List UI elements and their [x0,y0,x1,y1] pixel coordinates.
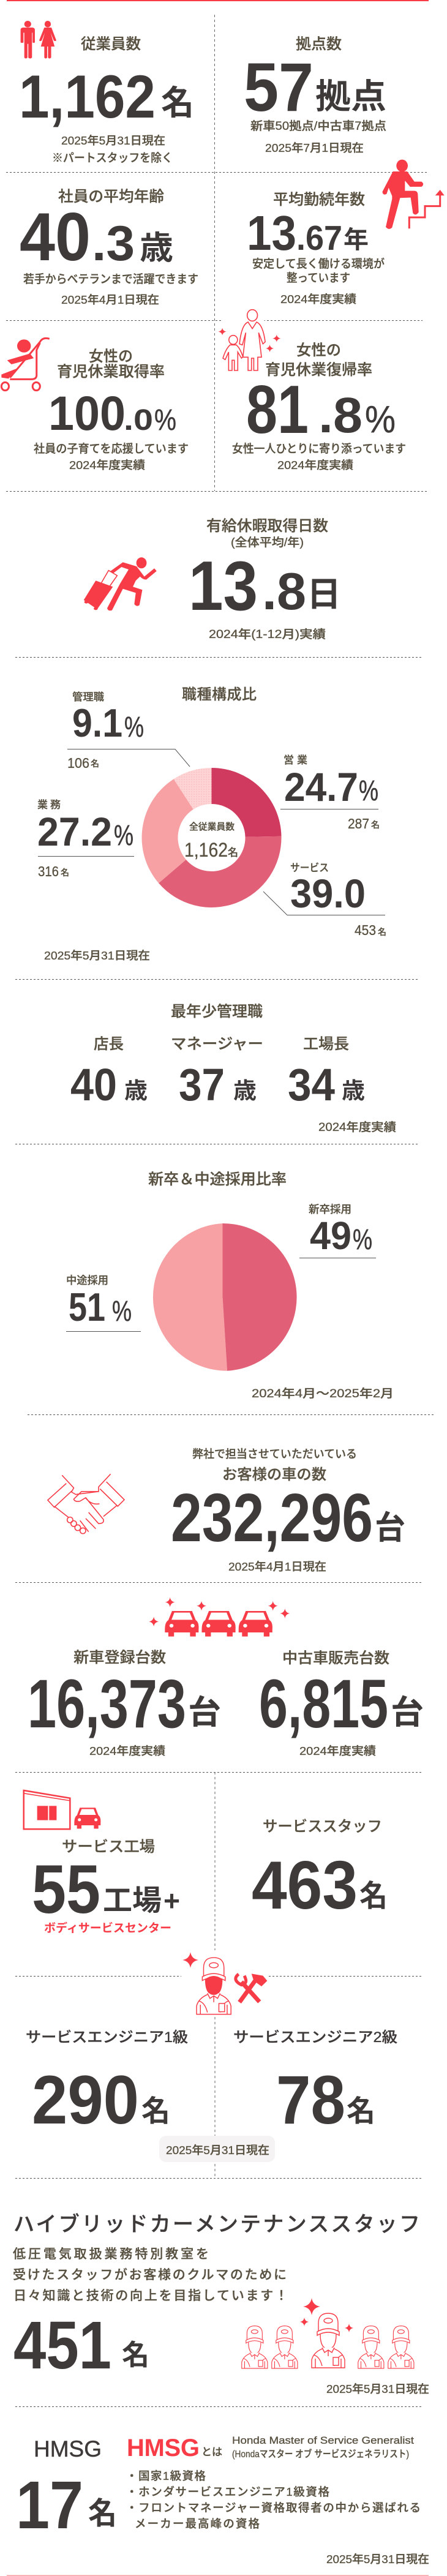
label: office work: 名 [61,868,69,877]
used cars column [259,1650,424,1757]
icon: handshake [48,1474,124,1534]
date: 2025年5月31日現在 [326,2383,429,2395]
label: office work: 316 [38,863,59,879]
definition title: とは [201,2446,222,2458]
icon: five workers with sparkles [242,2298,414,2368]
used cars column: 6,815 [259,1665,388,1742]
column: store manager: 店長 [94,1035,124,1053]
label: management: 106 [67,755,89,771]
date: 2025年5月31日現在 [61,134,165,147]
value: 57 [244,49,314,126]
new cars column: 新車登録台数 [73,1649,166,1666]
description: 日々知識と技術の向上を目指しています！ [13,2289,288,2303]
heading [57,348,165,380]
panel: average tenure [247,160,445,306]
icon: three cars with sparkles [149,1598,290,1637]
label: office work [37,799,134,879]
date pill [159,2136,275,2162]
label: sales: 名 [371,820,380,830]
used cars column: 2024年度実績 [299,1744,376,1757]
column: manager [171,1036,263,1110]
label: office work: 27.2 [37,809,112,854]
value: 100 [48,386,126,440]
heading: 育児休業復帰率 [265,361,372,378]
heading: サービス工場 [62,1838,155,1855]
value: 1,162 [19,62,156,130]
label: management: 管理職 [72,691,104,703]
date: 2024年4月〜2025年2月 [252,1387,394,1400]
value: 名 [122,2339,149,2371]
column: factory manager [288,1035,365,1110]
label: office work: 業務 [37,799,61,811]
date: 2024年度実績 [318,1121,396,1134]
pie chart [153,1223,297,1371]
top rule [7,0,429,1]
full name [232,2435,414,2460]
panel: average age [20,188,198,306]
panel: job composition [37,686,386,962]
label: sales [280,754,380,832]
date: 2024年度実績 [280,293,356,306]
value: % [365,399,396,441]
column: factory manager: 歳 [342,1078,365,1103]
label: management: 名 [91,759,99,768]
label: sales: 営業 [284,754,307,766]
heading: 平均勤続年数 [273,191,365,208]
used cars column: 中古車販売台数 [282,1650,389,1667]
label: sales: 287 [348,816,369,832]
used cars column: 台 [391,1694,424,1731]
value [189,547,341,625]
panel: service engineer grade 1 [26,2029,188,2138]
note: ※パートスタッフを除く [52,151,173,165]
panel: childcare return rate [219,309,406,471]
value [244,49,386,126]
date: 2025年5月31日現在 [44,949,150,962]
label: service: 39.0 [290,871,366,916]
column: manager: 歳 [233,1078,257,1103]
value: + [163,1885,180,1917]
value: 78 [276,2062,345,2138]
label: new graduates: 新卒採用 [309,1203,351,1215]
body service centre note: ボディサービスセンター [44,1921,171,1935]
value: .67 [296,219,342,258]
heading: 職種構成比 [182,686,257,703]
value: .8 [262,563,306,621]
label: service: サービス [290,862,329,874]
value: 55 [32,1851,100,1928]
subheading: (全体平均/年) [231,536,304,549]
panel: childcare leave rate [1,338,189,471]
heading: サービスエンジニア2級 [233,2029,397,2046]
qualification list: メーカー最高峰の資格 [135,2517,260,2530]
value: 40 [20,199,91,275]
column: manager: 37 [179,1059,225,1110]
value [246,372,396,448]
panel: youngest managers [70,1003,396,1134]
value: 13 [189,547,258,625]
label: sales: 24.7 [284,764,358,809]
value: 名 [359,1880,388,1913]
panel: service factories [24,1790,180,1935]
value: 名 [161,84,194,122]
heading: お客様の車の数 [222,1466,326,1483]
panel: HMSG [16,2435,429,2566]
label: new graduates: 49 [310,1214,351,1258]
value [48,386,176,440]
donut centre total: 全従業員数 [189,822,235,832]
full name: Honda Master of Service Generalist [232,2435,414,2446]
date: 2025年7月1日現在 [265,141,364,154]
label: mid-career: % [112,1294,132,1327]
description [13,2247,288,2303]
heading: 最年少管理職 [171,1003,263,1020]
value: 名 [347,2095,375,2128]
panel: paid leave [84,517,341,641]
heading: HMSG [34,2436,102,2461]
heading [265,342,372,378]
value: 290 [32,2062,139,2138]
column: store manager: 40 [70,1059,117,1110]
donut chart [142,768,282,907]
panel: employees [19,21,194,165]
qualification list: ・国家1級資格 [126,2469,206,2482]
panel: hybrid maintenance staff [13,2213,429,2395]
label: new graduates [299,1203,376,1258]
label: management: 9.1 [72,700,122,745]
date pill: 2025年5月31日現在 [166,2144,269,2157]
donut centre total: 1,162 [184,839,228,861]
date: 2024年(1-12月)実績 [209,628,326,641]
bottom rule [7,2575,429,2576]
value: 81 [246,372,309,448]
description: 受けたスタッフがお客様のクルマのために [13,2268,287,2282]
value: .0 [124,404,153,437]
value [247,206,369,260]
full name: (Hondaマスター オブ サービスジェネラリスト) [232,2448,409,2460]
label: management: % [124,710,144,743]
value [32,1851,180,1928]
label: service: 453 [355,922,376,938]
label: mid-career: 中途採用 [66,1274,108,1286]
value: .3 [92,216,135,271]
value: 232,296 [171,1480,373,1556]
new cars column: 16,373 [28,1665,186,1742]
qualification list: ・フロントマネージャー資格取得者の中から選ばれる [126,2501,421,2514]
panel: service engineer grade 2 [233,2029,397,2138]
icon: factory and car [24,1790,100,1829]
panel: customer cars [48,1448,405,1573]
date: 2025年4月1日現在 [228,1560,326,1573]
label: mid-career [66,1274,141,1331]
date: 2024年度実績 [69,459,145,471]
column: factory manager: 工場長 [303,1035,349,1053]
heading: 育児休業取得率 [57,363,165,380]
value: .8 [318,388,362,443]
label: service: 名 [378,927,386,937]
column: manager: マネージャー [171,1036,263,1053]
new cars column: 2024年度実績 [89,1744,165,1757]
panel: service staff [252,1818,388,1923]
value: 463 [252,1847,358,1923]
label: office work: % [114,819,133,851]
value: 名 [88,2496,117,2531]
date: 2024年度実績 [277,459,353,471]
heading: サービススタッフ [263,1818,382,1835]
column: factory manager: 34 [288,1059,335,1110]
caption: 安定して長く働ける環境が [252,257,385,271]
date: 2025年4月1日現在 [61,293,159,306]
caption: 女性一人ひとりに寄り添っています [232,442,406,456]
icon: engineer with tools [181,1950,267,2016]
icon: mother and child [219,309,280,372]
subheading: 弊社で担当させていただいている [192,1448,357,1460]
value: 年 [344,227,369,253]
donut centre total [184,822,238,861]
caption: 若手からベテランまで活躍できます [23,272,198,286]
icon: man and woman [21,21,56,59]
date: 2025年5月31日現在 [326,2553,429,2566]
description: 低圧電気取扱業務特別教室を [13,2247,209,2261]
label: mid-career: 51 [69,1285,105,1329]
icon: stroller [1,338,50,391]
value: 台 [375,1510,405,1546]
value: 日 [307,575,341,614]
heading: 従業員数 [81,36,141,53]
value [20,199,173,275]
heading: 社員の平均年齢 [58,188,164,205]
label: new graduates: % [353,1223,372,1255]
label: sales: % [359,774,378,806]
panel: car sales [28,1598,424,1757]
heading: 拠点数 [296,36,342,53]
definition title: HMSG [127,2435,200,2461]
breakdown: 新車50拠点/中古車7拠点 [250,119,386,133]
heading: 女性の [89,348,133,365]
heading: ハイブリッドカーメンテナンススタッフ [13,2213,420,2236]
qualification list: ・ホンダサービスエンジニア1級資格 [126,2485,329,2498]
heading: 有給休暇取得日数 [206,517,328,535]
value: 拠点 [315,77,386,116]
value: 451 [13,2308,111,2383]
heading: 女性の [296,342,341,359]
qualification list [126,2469,421,2530]
icon: runner with suitcase [84,557,157,610]
column: store manager: 歳 [124,1078,148,1103]
value: 17 [16,2468,83,2543]
value: 13 [247,206,296,260]
donut centre total: 名 [228,847,238,858]
panel: locations [244,36,386,154]
label: service [263,862,386,938]
column: store manager [70,1035,148,1110]
value: 工場 [103,1884,162,1917]
label: management [67,691,190,771]
icon: person climbing stairs [382,160,445,229]
new cars column: 台 [188,1694,221,1731]
heading: 新卒＆中途採用比率 [148,1171,287,1188]
panel: hiring ratio [66,1171,394,1400]
heading: サービスエンジニア1級 [26,2029,188,2046]
caption: 社員の子育てを応援しています [34,442,189,456]
value: 歳 [140,230,173,266]
panel: average tenure: 整っています [287,271,350,285]
value: % [154,404,176,437]
value: 名 [141,2095,170,2128]
new cars column [28,1649,221,1757]
